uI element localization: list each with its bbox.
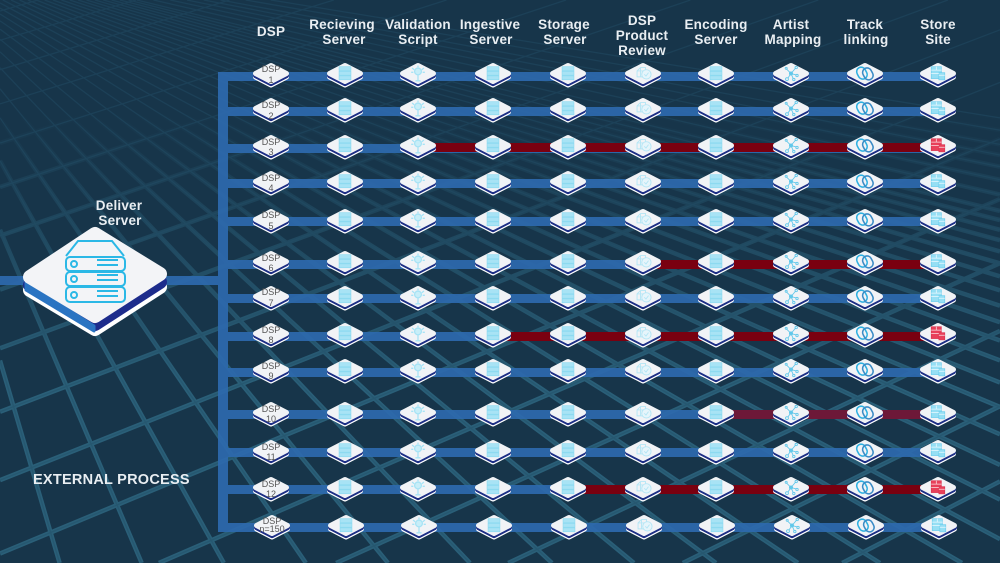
encoding server — [700, 288, 732, 308]
store site — [922, 362, 954, 381]
receiving server — [330, 326, 360, 345]
row: DSP 1 — [256, 64, 954, 85]
artist mapping — [776, 174, 806, 193]
product review — [628, 404, 658, 424]
product review — [628, 480, 658, 499]
receiving server — [330, 66, 360, 85]
heading: Ingestive Server: Ingestive — [460, 17, 520, 32]
product review — [628, 518, 660, 537]
connector lines — [0, 72, 934, 532]
DSP 11 node: DSP — [262, 442, 280, 452]
Deliver Server node — [26, 234, 160, 331]
artist mapping — [776, 480, 806, 499]
ingestive server — [478, 442, 508, 462]
heading: Validation Script: Script — [398, 32, 438, 47]
store site — [922, 254, 954, 273]
encoding server — [700, 480, 732, 499]
DSP 5 node: 5 — [268, 221, 274, 231]
receiving server — [330, 288, 360, 308]
store site — [922, 442, 954, 462]
DSP 5 node: DSP — [262, 210, 280, 220]
storage server — [552, 174, 584, 193]
receiving server — [330, 174, 360, 193]
DSP 10 node: DSP — [262, 404, 280, 414]
storage server — [552, 442, 584, 462]
store site — [922, 66, 954, 85]
encoding server — [702, 518, 732, 537]
DSP 9 node: DSP — [262, 361, 280, 371]
heading: Encoding Server: Encoding — [684, 17, 748, 32]
receiving server — [330, 254, 360, 273]
ingestive server — [478, 518, 510, 537]
ingestive server — [478, 404, 508, 424]
product review — [628, 442, 658, 462]
receiving server — [330, 518, 362, 537]
ingestive server — [478, 326, 508, 345]
store site — [924, 518, 954, 537]
receiving server — [330, 442, 360, 462]
track linking — [850, 100, 880, 120]
track linking — [850, 212, 880, 231]
product review — [628, 100, 658, 120]
DSP 7 node: DSP — [262, 287, 280, 297]
DSP 10 node — [256, 404, 286, 424]
failed path DSP 3 — [418, 143, 934, 152]
row: DSP 3 — [256, 137, 954, 157]
DSP 1 node: 1 — [268, 75, 274, 85]
artist mapping — [776, 362, 806, 381]
receiving server — [330, 100, 360, 120]
DSP 2 node: DSP — [262, 100, 280, 110]
ingestive server — [478, 288, 508, 308]
product review — [628, 326, 658, 345]
ingestive server — [478, 254, 508, 273]
product review — [628, 66, 658, 85]
validation script — [402, 326, 434, 345]
DSP 6 node: 6 — [268, 263, 274, 273]
storage server — [552, 212, 584, 231]
store site — [922, 174, 954, 193]
DSP n=150 node — [256, 516, 288, 537]
validation script — [402, 288, 434, 308]
encoding server — [700, 326, 732, 345]
ingestive server — [478, 212, 508, 231]
DSP 4 node — [256, 173, 286, 193]
track linking — [850, 288, 880, 308]
row: DSP 4 — [256, 173, 954, 193]
heading: Recieving Server: Recieving — [309, 17, 375, 32]
product review — [628, 362, 658, 381]
row: DSP 8 — [256, 325, 954, 345]
receiving server — [330, 404, 360, 424]
artist mapping — [776, 254, 806, 273]
receiving server — [330, 362, 360, 381]
track linking — [850, 518, 882, 537]
ingestive server — [478, 66, 508, 85]
encoding server — [700, 174, 732, 193]
storage server — [554, 518, 584, 537]
store site — [922, 288, 954, 308]
heading: Track linking: Track — [847, 17, 883, 32]
row: DSP 9 — [256, 361, 954, 381]
ingestive server — [478, 174, 508, 193]
DSP 3 node — [256, 137, 286, 157]
track linking — [850, 362, 880, 381]
DSP 10 node: 10 — [266, 414, 276, 424]
DSP 7 node: 7 — [268, 298, 274, 308]
heading: Store Site: Site — [925, 32, 951, 47]
storage server — [552, 138, 584, 157]
process node matrix — [256, 64, 954, 537]
DSP n=150 node: DSP — [263, 516, 281, 526]
validation script — [402, 174, 434, 193]
DSP 5 node — [256, 210, 286, 231]
failed path DSP 6 — [643, 260, 934, 269]
artist mapping — [776, 100, 806, 120]
DSP 6 node — [256, 253, 286, 273]
product review — [628, 174, 658, 193]
DSP 1 node — [256, 64, 286, 85]
storage server — [552, 288, 584, 308]
store site — [922, 100, 954, 120]
encoding server — [700, 362, 732, 381]
store site — [922, 212, 954, 231]
DSP 12 node — [256, 479, 286, 499]
store site — [922, 404, 954, 424]
track linking — [850, 138, 880, 157]
receiving server — [330, 212, 360, 231]
heading: Store Site: Store — [920, 17, 956, 32]
encoding server — [700, 442, 732, 462]
DSP 1 node: DSP — [262, 64, 280, 74]
receiving server — [330, 138, 360, 157]
row: DSP 11 — [256, 442, 954, 462]
heading: Encoding Server: Server — [694, 32, 738, 47]
heading: Validation Script: Validation — [385, 17, 451, 32]
DSP 12 node: 12 — [266, 489, 276, 499]
DSP 8 node — [256, 325, 286, 345]
track linking — [850, 404, 880, 424]
heading: Storage Server: Server — [543, 32, 587, 47]
column headings — [257, 13, 956, 58]
storage server — [552, 254, 584, 273]
ingestive server — [478, 100, 508, 120]
row: DSP 6 — [256, 253, 954, 273]
encoding server — [700, 212, 732, 231]
DSP 2 node — [256, 100, 286, 121]
DSP 12 node: DSP — [262, 479, 280, 489]
storage server — [552, 66, 584, 85]
ingestive server — [478, 362, 508, 381]
row: DSP 12 — [256, 479, 954, 499]
row: DSP 10 — [256, 404, 954, 424]
product review — [628, 288, 658, 308]
Deliver Server heading: Deliver — [96, 198, 142, 213]
track linking — [850, 254, 880, 273]
storage server — [552, 100, 584, 120]
receiving server — [330, 480, 360, 499]
track linking — [850, 326, 880, 345]
artist mapping — [776, 212, 806, 231]
validation script — [402, 66, 434, 85]
row: DSP n=150 — [256, 516, 954, 537]
validation script — [402, 480, 434, 499]
DSP 9 node: 9 — [268, 371, 274, 381]
DSP 9 node — [256, 361, 286, 381]
storage server — [552, 404, 584, 424]
encoding server — [700, 254, 732, 273]
store site failed — [922, 326, 954, 345]
ingestive server — [478, 138, 508, 157]
artist mapping — [776, 288, 806, 308]
validation script — [402, 442, 434, 462]
artist mapping — [776, 442, 806, 462]
DSP 11 node: 11 — [266, 452, 276, 462]
DSP n=150 node: n=150 — [259, 524, 285, 534]
failed path DSP 12 — [568, 485, 934, 494]
row: DSP 7 — [256, 287, 954, 308]
encoding server — [700, 100, 732, 120]
heading: Artist Mapping: Mapping — [765, 32, 821, 47]
icon: server stack — [66, 241, 125, 302]
product review — [628, 212, 658, 231]
heading: DSP Product Review: DSP — [628, 13, 656, 28]
DSP 4 node: DSP — [262, 173, 280, 183]
row: DSP 5 — [256, 210, 954, 231]
product review — [628, 254, 658, 273]
product review — [628, 138, 658, 157]
External process title: EXTERNAL PROCESS — [33, 472, 190, 488]
encoding server — [700, 404, 732, 424]
store site failed — [922, 138, 954, 157]
failed path DSP 10 — [730, 410, 934, 419]
validation script — [402, 212, 434, 231]
validation script — [402, 404, 434, 424]
encoding server — [700, 66, 732, 85]
track linking — [850, 480, 880, 499]
DSP 11 node — [256, 442, 286, 462]
ingestive server — [478, 480, 508, 499]
artist mapping — [776, 404, 806, 424]
heading: Storage Server: Storage — [538, 17, 590, 32]
DSP 2 node: 2 — [268, 111, 274, 121]
artist mapping — [776, 138, 806, 157]
heading: Track linking: linking — [844, 32, 888, 47]
heading: Artist Mapping: Artist — [773, 17, 809, 32]
artist mapping — [776, 66, 806, 85]
DSP 8 node: DSP — [262, 325, 280, 335]
DSP 3 node: DSP — [262, 137, 280, 147]
validation script — [402, 100, 434, 120]
storage server — [552, 480, 584, 499]
encoding server — [700, 138, 732, 157]
DSP 3 node: 3 — [268, 147, 274, 157]
track linking — [850, 442, 880, 462]
DSP 4 node: 4 — [268, 183, 274, 193]
storage server — [552, 362, 584, 381]
validation script — [402, 362, 434, 381]
Deliver Server heading: Server — [98, 213, 142, 228]
track linking — [850, 174, 880, 193]
heading: DSP Product Review: Review — [618, 43, 666, 58]
storage server — [552, 326, 584, 345]
artist mapping — [776, 518, 808, 537]
store site failed — [922, 480, 954, 499]
failed path DSP 8 — [493, 332, 934, 341]
row: DSP 2 — [256, 100, 954, 121]
validation script — [402, 254, 434, 273]
artist mapping — [776, 326, 806, 345]
DSP 8 node: 8 — [268, 335, 274, 345]
heading: DSP Product Review: Product — [616, 28, 669, 43]
validation script — [402, 138, 434, 157]
heading: Ingestive Server: Server — [469, 32, 513, 47]
DSP 6 node: DSP — [262, 253, 280, 263]
heading: Recieving Server: Server — [322, 32, 366, 47]
DSP 7 node — [256, 287, 286, 308]
heading: DSP: DSP — [257, 24, 285, 39]
validation script — [404, 518, 434, 537]
track linking — [850, 66, 880, 85]
